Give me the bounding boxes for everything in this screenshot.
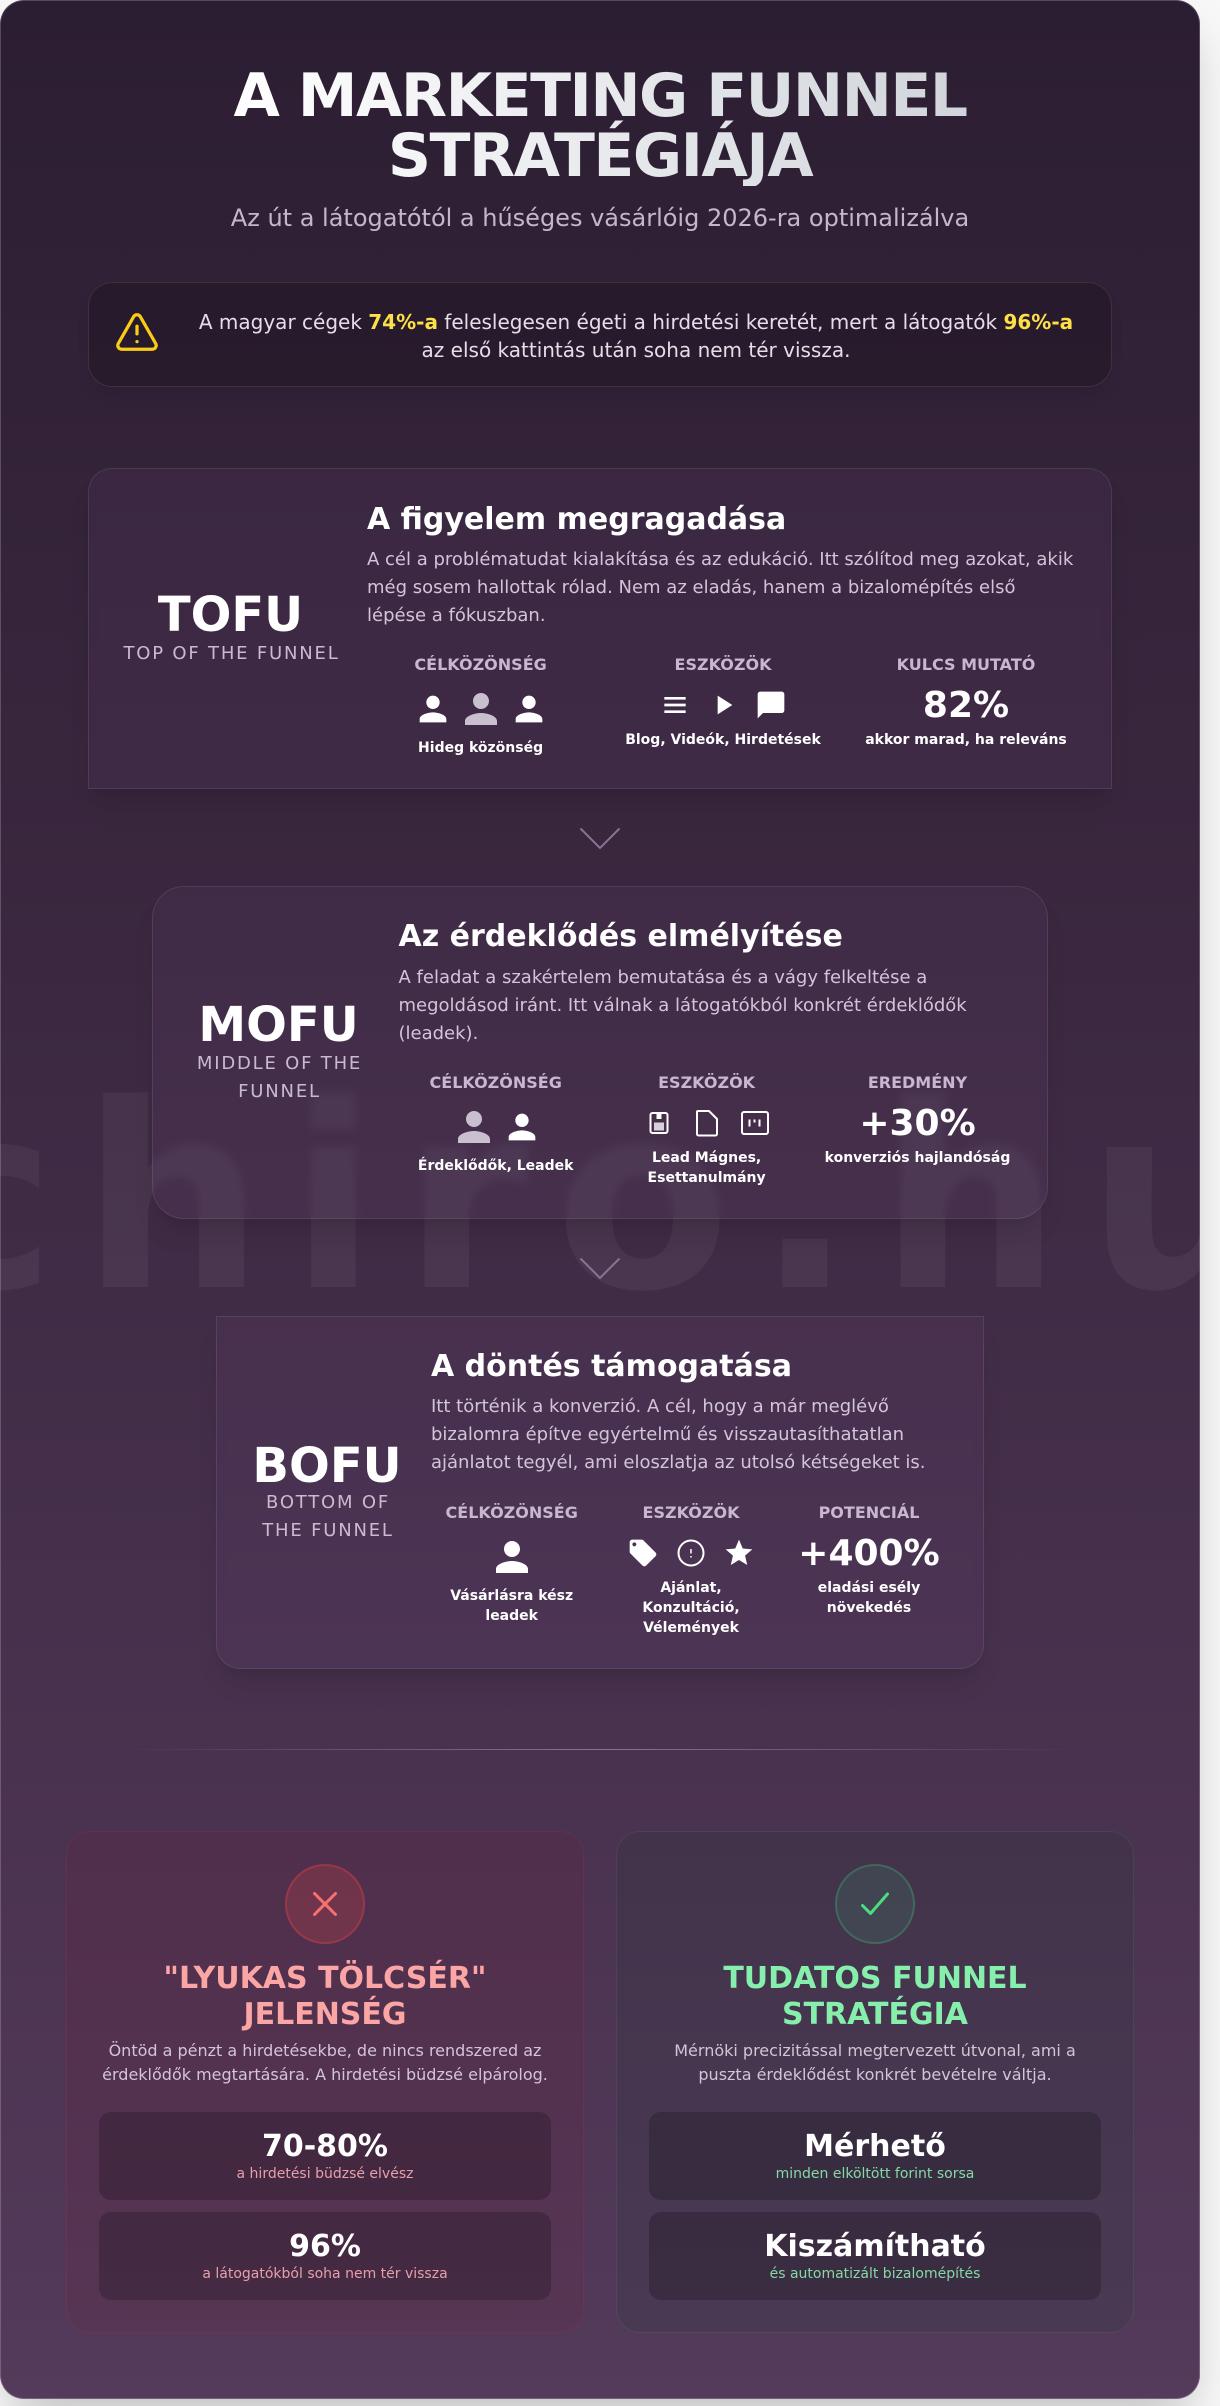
BOFU description: Itt történik a konverzió. A cél, hogy a már meglévő	[431, 1396, 889, 1417]
subtitle: Az út a látogatótól a hűséges vásárlóig 2026-ra optimalizálva	[231, 204, 969, 232]
stat: predictable: és automatizált bizalomépítés	[770, 2266, 980, 2282]
MOFU sublabel	[197, 1053, 362, 1102]
panel: BOFU	[216, 1316, 984, 1669]
TOFU audience	[414, 655, 547, 756]
heading: JELENSÉG	[243, 1996, 407, 2032]
BOFU potential: POTENCIÁL	[819, 1503, 919, 1522]
TOFU label: TOFU	[158, 587, 303, 643]
TOFU audience: Hideg közönség	[418, 740, 543, 756]
arrow: chevron 1	[580, 828, 620, 850]
BOFU potential	[798, 1503, 940, 1616]
TOFU tools	[625, 655, 821, 748]
BOFU tools: ESZKÖZÖK	[643, 1503, 739, 1522]
TOFU description: A cél a problématudat kialakítása és az edukáció. Itt szólítod meg azokat, akik	[367, 549, 1073, 570]
MOFU heading: Az érdeklődés elmélyítése	[398, 919, 843, 954]
MOFU sublabel: MIDDLE OF THE	[197, 1053, 362, 1074]
description: Mérnöki precizitással megtervezett útvonal, ami a	[674, 2041, 1076, 2060]
MOFU tools: Lead Mágnes,	[652, 1150, 761, 1166]
TOFU audience: CÉLKÖZÖNSÉG	[414, 655, 547, 674]
TOFU heading: A figyelem megragadása	[367, 502, 786, 537]
TOFU metric: KULCS MUTATÓ	[897, 655, 1035, 674]
description	[674, 2041, 1076, 2084]
heading	[163, 1960, 487, 2032]
panel: BOFU: leadek	[485, 1608, 538, 1624]
icon: person	[496, 1541, 528, 1573]
stat: measurable	[649, 2112, 1101, 2200]
MOFU description: A feladat a szakértelem bemutatása és a vágy felkeltése a	[398, 967, 927, 988]
stat: predictable	[649, 2212, 1101, 2300]
BOFU audience: CÉLKÖZÖNSÉG	[446, 1503, 578, 1522]
description: puszta érdeklődést konkrét bevételre váltja.	[698, 2065, 1052, 2084]
alert text: az első kattintás után soha nem tér vissza.	[422, 338, 850, 362]
stat: never return: 96%	[289, 2228, 361, 2264]
BOFU sublabel: BOTTOM OF	[266, 1492, 390, 1513]
TOFU metric: 82%	[923, 685, 1009, 726]
TOFU description	[367, 549, 1074, 626]
BOFU tools: Konzultáció,	[642, 1600, 740, 1616]
title: STRATÉGIÁJA	[388, 121, 812, 191]
BOFU potential: +400%	[798, 1533, 940, 1574]
BOFU sublabel: THE FUNNEL	[262, 1520, 394, 1541]
TOFU metric: akkor marad, ha releváns	[865, 732, 1067, 748]
BOFU tools: Ajánlat,	[660, 1580, 722, 1596]
BOFU description	[431, 1396, 926, 1473]
alert text: A magyar cégek 74%-a feleslegesen égeti a hirdetési keretét, mert a látogatók 96%-a	[199, 310, 1073, 334]
description: érdeklődők megtartására. A hirdetési büdzsé elpárolog.	[102, 2065, 548, 2084]
MOFU tools: Esettanulmány	[648, 1170, 766, 1186]
icons: offer, consultation, reviews	[630, 1540, 752, 1566]
heading: "LYUKAS TÖLCSÉR"	[163, 1960, 487, 1996]
heading: STRATÉGIA	[782, 1996, 968, 2032]
description: Öntöd a pénzt a hirdetésekbe, de nincs rendszered az	[109, 2041, 541, 2060]
icon: cross	[285, 1864, 365, 1944]
BOFU audience: Vásárlásra kész	[450, 1588, 573, 1604]
stat: budget lost	[99, 2112, 551, 2200]
MOFU description: (leadek).	[398, 1023, 478, 1044]
TOFU tools: ESZKÖZÖK	[675, 655, 771, 674]
TOFU tools: Blog, Videók, Hirdetések	[625, 732, 821, 748]
MOFU result	[825, 1073, 1010, 1166]
MOFU description	[398, 967, 967, 1044]
panel: BOFU: Vélemények	[643, 1620, 739, 1636]
title: A MARKETING FUNNEL	[233, 61, 967, 131]
stat: budget lost: a hirdetési büdzsé elvész	[237, 2166, 413, 2182]
stat: never return	[99, 2212, 551, 2300]
MOFU audience: CÉLKÖZÖNSÉG	[430, 1073, 562, 1092]
title	[233, 61, 967, 191]
TOFU description: még sosem hallottak rólad. Nem az eladás, hanem a bizalomépítés első	[367, 577, 1015, 598]
panel: TOFU	[88, 468, 1112, 789]
icons: blog, video, ad	[664, 692, 784, 718]
BOFU tools	[630, 1503, 752, 1636]
MOFU result: +30%	[859, 1103, 976, 1144]
BOFU description: bizalomra építve egyértelmű és visszautasíthatatlan	[431, 1424, 904, 1445]
TOFU description: lépése a fókuszban.	[367, 605, 546, 626]
MOFU label: MOFU	[198, 997, 359, 1053]
arrow: chevron 2	[580, 1258, 620, 1280]
MOFU result: konverziós hajlandóság	[825, 1150, 1010, 1166]
stat: budget lost: 70-80%	[262, 2128, 388, 2164]
TOFU metric	[865, 654, 1067, 748]
icon: warning triangle	[116, 313, 158, 351]
BOFU sublabel	[262, 1492, 394, 1541]
heading: TUDATOS FUNNEL	[723, 1960, 1027, 1996]
icons: magnet, document, case study	[650, 1110, 769, 1136]
panel: MOFU	[152, 886, 1048, 1219]
panel: leaky funnel	[66, 1831, 584, 2333]
panel: conscious funnel	[616, 1831, 1134, 2333]
heading	[723, 1960, 1027, 2032]
alert banner	[88, 282, 1112, 387]
BOFU label: BOFU	[252, 1438, 402, 1494]
alert text	[199, 310, 1073, 362]
BOFU audience	[446, 1503, 578, 1624]
MOFU audience: Érdeklődők, Leadek	[418, 1158, 573, 1174]
BOFU heading: A döntés támogatása	[431, 1349, 792, 1384]
stat: never return: a látogatókból soha nem tér vissza	[202, 2266, 448, 2282]
MOFU description: megoldásod iránt. Itt válnak a látogatókból konkrét érdeklődők	[398, 995, 967, 1016]
icon: people	[420, 693, 542, 725]
BOFU potential: eladási esély	[818, 1580, 920, 1596]
BOFU potential: növekedés	[827, 1600, 911, 1616]
stat: measurable: minden elköltött forint sorsa	[776, 2166, 974, 2182]
icon: check	[835, 1864, 915, 1944]
MOFU audience	[418, 1073, 574, 1174]
stat: predictable: Kiszámítható	[764, 2228, 986, 2264]
MOFU tools	[648, 1073, 769, 1186]
stat: measurable: Mérhető	[804, 2128, 946, 2164]
MOFU result: EREDMÉNY	[868, 1073, 967, 1092]
icon: people	[458, 1111, 536, 1143]
BOFU description: ajánlatot tegyél, ami eloszlatja az utolsó kétségeket is.	[431, 1452, 926, 1473]
TOFU sublabel: TOP OF THE FUNNEL	[123, 643, 340, 664]
description	[102, 2041, 548, 2084]
MOFU tools: ESZKÖZÖK	[658, 1073, 755, 1092]
MOFU sublabel: FUNNEL	[238, 1081, 321, 1102]
